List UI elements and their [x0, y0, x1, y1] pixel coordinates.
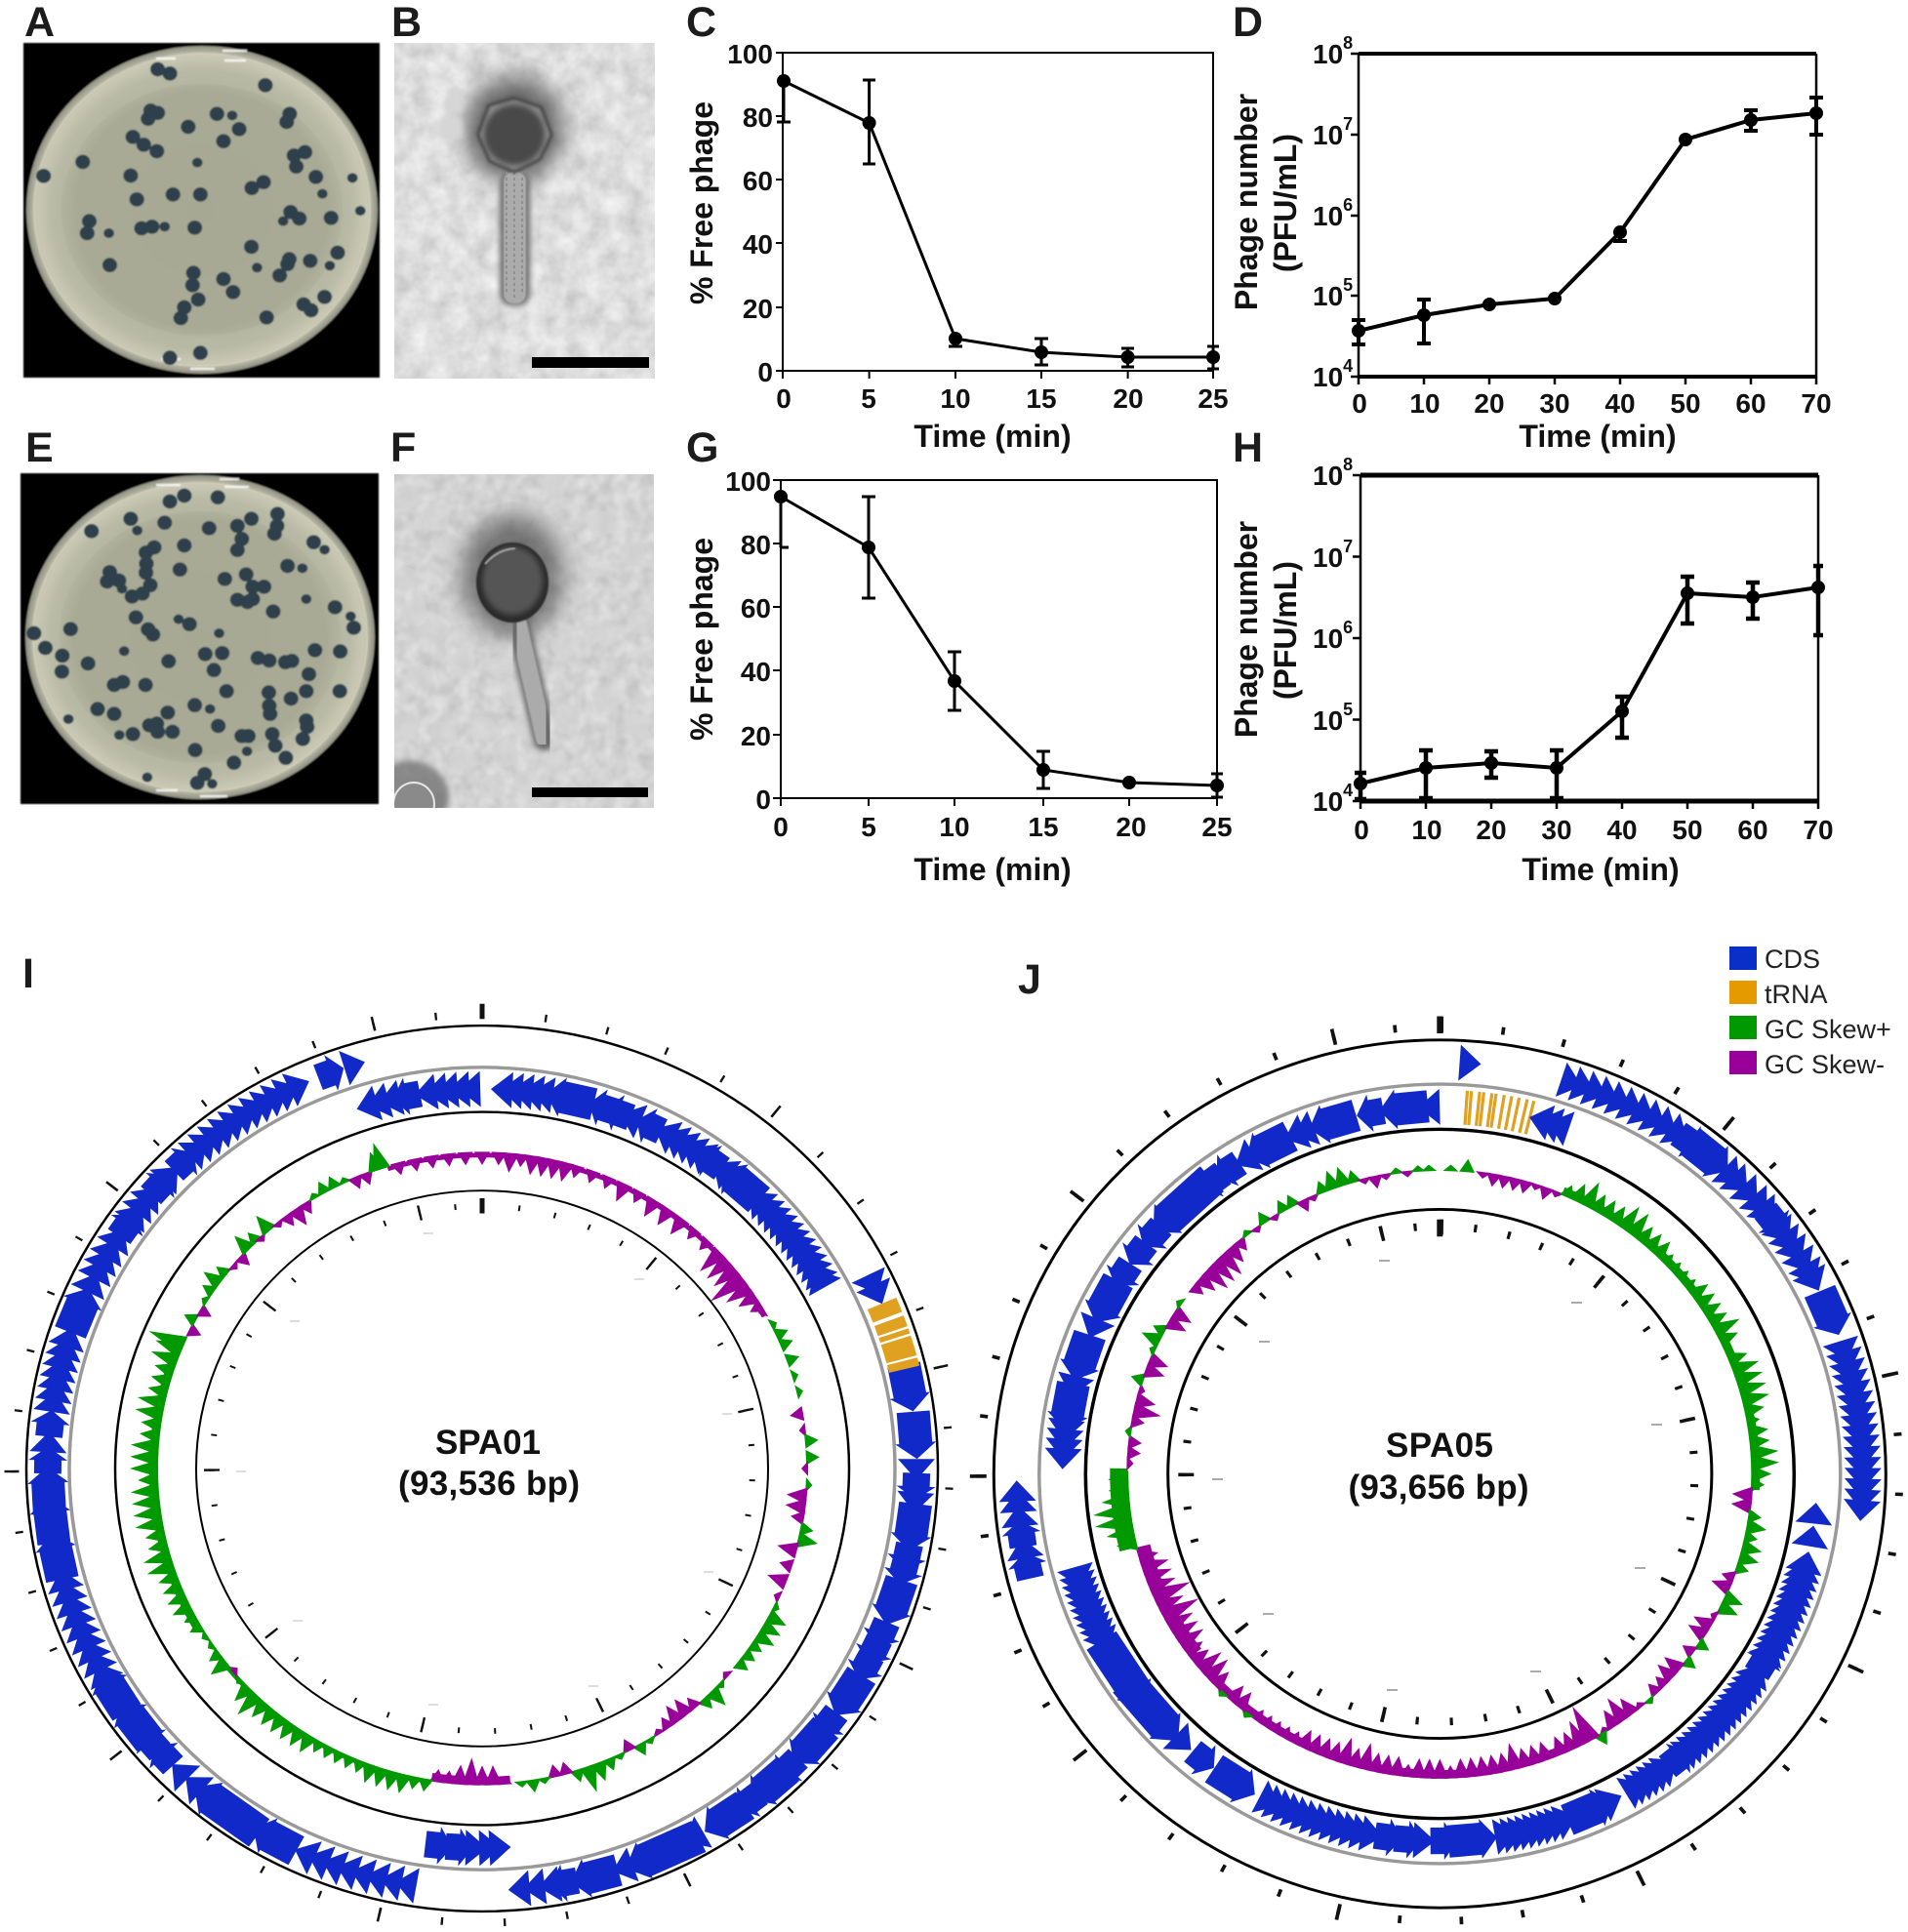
- x axis labels C: 0: [776, 383, 792, 414]
- panel label I: I: [22, 950, 34, 997]
- x axis labels H: 40: [1606, 815, 1638, 845]
- ring circles J: [994, 1040, 1886, 1908]
- y axis labels D: 10: [1313, 120, 1343, 150]
- y axis labels H: 6: [1343, 618, 1353, 637]
- y axis labels D: 8: [1343, 33, 1353, 53]
- GC skew track I: [33, 1032, 931, 1905]
- legend item GC Skew minus: GC Skew-: [1765, 1050, 1885, 1079]
- x axis labels H: 70: [1803, 815, 1834, 845]
- tRNA bars I: [0, 915, 1052, 1932]
- x axis labels D: 20: [1474, 388, 1505, 419]
- genome label SPA01: SPA01: [435, 1424, 541, 1462]
- panel label H: H: [1233, 424, 1263, 471]
- x axis labels H: 30: [1541, 815, 1572, 845]
- x axis labels D: 30: [1539, 388, 1570, 419]
- ring circles I: [26, 1026, 938, 1912]
- x axis labels H: [1354, 815, 1834, 845]
- faint scale labels J: [1212, 1261, 1662, 1690]
- x axis title G: Time (min): [913, 852, 1072, 887]
- y axis title G: % Free phage: [684, 538, 719, 741]
- legend item CDS: CDS: [1765, 945, 1820, 974]
- x axis labels H: 60: [1737, 815, 1768, 845]
- panel A: plaque plate photo: [23, 43, 380, 378]
- genome label SPA05: [1349, 1427, 1528, 1507]
- panel label B: B: [391, 0, 422, 46]
- x axis labels D: 70: [1801, 388, 1832, 419]
- panel D: phage number chart: [1229, 33, 1832, 454]
- faint scale labels I: [236, 1233, 732, 1705]
- y axis title H: Phage number: [1229, 521, 1264, 738]
- y axis labels C: 40: [743, 229, 773, 260]
- y axis labels H: 10: [1313, 786, 1343, 817]
- x axis labels C: 25: [1198, 383, 1229, 414]
- y axis labels G: 60: [741, 593, 771, 624]
- data series G: [774, 490, 1224, 797]
- y axis labels D: 7: [1343, 114, 1353, 134]
- y axis labels G: 20: [741, 721, 771, 751]
- x axis labels G: 15: [1028, 812, 1059, 842]
- x axis labels D: 50: [1670, 388, 1701, 419]
- genome label SPA05: (93,656 bp): [1349, 1469, 1528, 1507]
- y axis labels H: 10: [1313, 543, 1343, 573]
- y axis labels C: 60: [743, 166, 773, 196]
- plot frame G: [773, 480, 1217, 806]
- y axis title D: (PFU/mL): [1268, 134, 1303, 272]
- x axis labels G: 10: [939, 812, 970, 842]
- x axis labels G: 5: [861, 812, 876, 842]
- x axis labels C: 15: [1026, 383, 1057, 414]
- y axis labels H: 5: [1343, 700, 1353, 719]
- x axis labels D: 40: [1604, 388, 1636, 419]
- y axis labels D: 10: [1313, 201, 1343, 231]
- y axis labels H: 4: [1343, 781, 1353, 800]
- y axis labels H: 7: [1343, 537, 1353, 556]
- y axis title H: [1229, 521, 1303, 738]
- x axis labels H: 10: [1411, 815, 1442, 845]
- y axis labels C: [727, 39, 773, 387]
- y axis labels H: 8: [1343, 455, 1353, 474]
- panel E: plaque plate photo: [20, 473, 379, 804]
- y axis labels D: 10: [1313, 362, 1343, 392]
- x axis labels D: 0: [1352, 388, 1367, 419]
- GC skew track J: [1012, 1058, 1868, 1890]
- legend item tRNA: tRNA: [1765, 980, 1828, 1009]
- x axis labels D: 10: [1409, 388, 1441, 419]
- tRNA bars J: [1463, 1091, 1535, 1135]
- y axis title C: % Free phage: [684, 101, 719, 304]
- y axis labels C: 80: [743, 102, 773, 133]
- inner CDS track J: [1044, 1086, 1835, 1862]
- y axis labels C: 20: [743, 294, 773, 324]
- panel F: electron micrograph of phage: [371, 474, 654, 831]
- panel label A: A: [24, 0, 55, 46]
- x axis labels C: [776, 383, 1229, 414]
- genome label SPA01: [398, 1424, 580, 1503]
- data series C: [777, 74, 1220, 369]
- y axis labels H: 10: [1313, 624, 1343, 654]
- x axis labels D: [1352, 388, 1832, 419]
- y axis labels D: [1313, 33, 1353, 392]
- x axis labels C: 10: [940, 383, 971, 414]
- y axis labels D: 10: [1313, 39, 1343, 69]
- y axis labels H: 10: [1313, 461, 1343, 491]
- legend: [1729, 945, 1891, 1079]
- scale bar F: [532, 787, 648, 797]
- panel label F: F: [390, 424, 416, 471]
- y axis labels H: 10: [1313, 705, 1343, 736]
- plot frame C: [776, 53, 1213, 379]
- x axis labels G: 20: [1116, 812, 1147, 842]
- y axis labels D: 5: [1343, 275, 1353, 295]
- y axis labels G: 0: [755, 785, 771, 815]
- y axis labels G: 40: [741, 657, 771, 687]
- y axis labels D: 6: [1343, 195, 1353, 215]
- y axis title D: Phage number: [1229, 94, 1264, 310]
- panel label E: E: [25, 424, 54, 471]
- inner CDS track I: [351, 1071, 841, 1867]
- x axis title C: Time (min): [913, 419, 1072, 454]
- panel H: phage number chart: [1229, 455, 1834, 887]
- x axis labels H: 0: [1354, 815, 1369, 845]
- panel I: SPA01 circular genome map: [0, 915, 1052, 1932]
- panel C: % free phage chart: [684, 39, 1229, 454]
- y axis labels G: [725, 466, 771, 815]
- y axis labels C: 0: [757, 357, 773, 387]
- y axis labels D: 4: [1343, 356, 1353, 376]
- x axis title D: Time (min): [1519, 419, 1677, 454]
- outer CDS track I: [26, 1045, 938, 1908]
- genome label SPA05: SPA05: [1386, 1427, 1493, 1465]
- x axis labels G: [773, 812, 1233, 842]
- panel J: SPA05 circular genome map: [978, 1017, 1901, 1923]
- legend item tRNA: [1729, 980, 1828, 1009]
- tick marks I: [12, 1004, 953, 1926]
- panel B: electron micrograph of phage: [394, 43, 655, 379]
- scale bar B: [532, 357, 649, 368]
- panel label C: C: [686, 0, 716, 46]
- y axis title H: (PFU/mL): [1268, 561, 1303, 700]
- x axis labels G: 0: [773, 812, 789, 842]
- genome label SPA01: (93,536 bp): [398, 1465, 580, 1503]
- x axis labels H: 50: [1672, 815, 1703, 845]
- legend item CDS: [1729, 945, 1820, 974]
- y axis labels D: 10: [1313, 281, 1343, 311]
- y axis labels G: 100: [725, 466, 771, 497]
- panel label G: G: [686, 424, 718, 471]
- panel label J: J: [1018, 956, 1041, 1003]
- x axis title H: Time (min): [1522, 852, 1680, 887]
- data series D: [1352, 98, 1823, 344]
- x axis labels D: 60: [1735, 388, 1766, 419]
- panel G: % free phage chart: [684, 466, 1233, 887]
- tick marks J: [978, 1017, 1901, 1923]
- x axis labels H: 20: [1476, 815, 1507, 845]
- x axis labels C: 20: [1113, 383, 1144, 414]
- plot frame D: [1359, 54, 1816, 377]
- x axis labels C: 5: [861, 383, 876, 414]
- y axis labels G: 80: [741, 530, 771, 560]
- y axis title D: [1229, 94, 1303, 310]
- outer CDS track J: [998, 1045, 1882, 1583]
- legend item GC Skew plus: GC Skew+: [1765, 1015, 1891, 1044]
- y axis labels C: 100: [727, 39, 773, 69]
- data series H: [1354, 566, 1825, 801]
- plot frame H: [1360, 475, 1818, 801]
- y axis labels H: [1313, 455, 1353, 817]
- panel label D: D: [1233, 0, 1263, 46]
- x axis labels G: 25: [1201, 812, 1233, 842]
